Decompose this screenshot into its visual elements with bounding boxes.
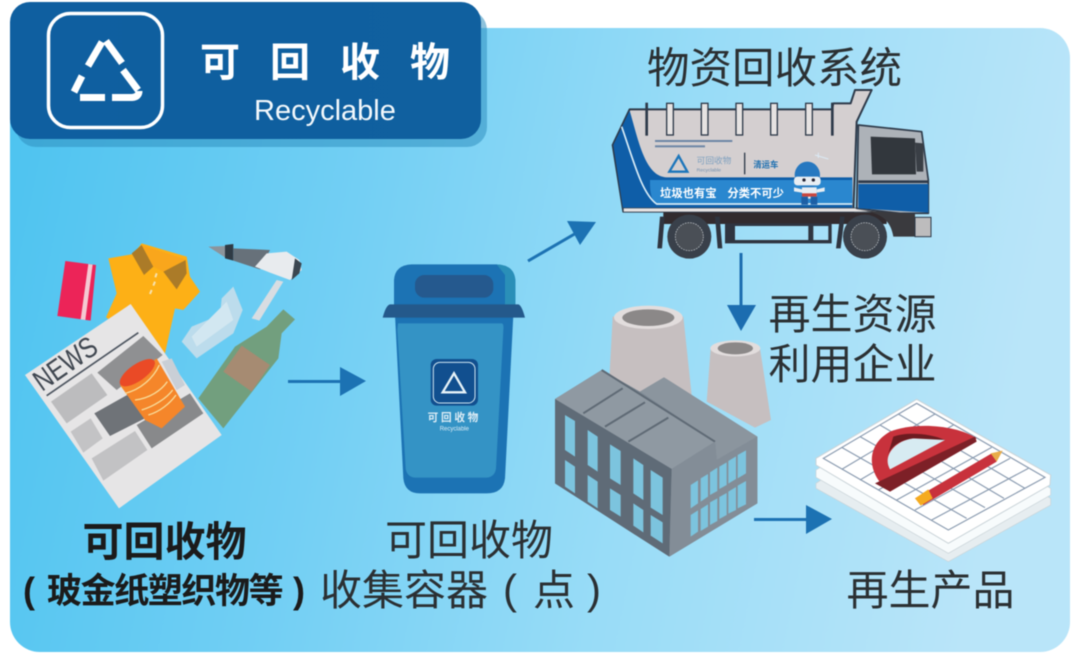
arrow: truck to factory — [727, 253, 756, 331]
caption: collection container: 可回收物 — [385, 517, 553, 564]
caption: collection container: ( — [503, 566, 517, 613]
caption: recyclables: 玻金纸塑织物等 — [47, 572, 283, 611]
caption: collection container — [320, 517, 601, 614]
cab — [857, 125, 928, 213]
icon: recycling truck: 分类不可少 — [727, 186, 784, 200]
green bottle — [198, 309, 295, 428]
heading: recovery system: 物资回收系统 — [647, 46, 902, 93]
mascot — [794, 153, 828, 205]
icon: recycling truck — [613, 90, 931, 259]
caption: recycled products: 再生产品 — [846, 567, 1015, 614]
side windows — [691, 450, 746, 537]
wheels — [667, 215, 887, 259]
panel: header banner — [10, 2, 487, 147]
caption: collection container: 收集容器 — [320, 567, 488, 614]
small cooling tower — [707, 340, 771, 428]
plastic wrap — [182, 287, 243, 358]
icon: recycled paper products — [816, 399, 1051, 562]
caption: recyclables: ( — [23, 570, 35, 611]
red book — [57, 261, 96, 321]
icon: recyclable items — [25, 243, 302, 508]
cargo body — [613, 90, 872, 212]
pencil — [915, 453, 997, 505]
chassis — [663, 212, 887, 224]
text: recycling enterprise: 利用企业 — [768, 341, 937, 388]
icon: recycling truck: Recyclable — [697, 167, 721, 173]
truck logo — [669, 156, 687, 172]
caption: recyclables: 可回收物 — [82, 519, 246, 565]
yellow shirt — [106, 243, 200, 353]
bin label — [431, 359, 478, 406]
building — [555, 370, 757, 557]
heading: english title: Recyclable — [254, 95, 396, 127]
icon: recycling bin — [383, 264, 525, 493]
caption: collection container: 点 — [533, 567, 575, 614]
large cooling tower — [609, 306, 692, 395]
small print — [655, 140, 732, 142]
paper stack — [816, 418, 1051, 562]
caption: recyclables: ) — [293, 570, 305, 611]
orange cup — [120, 358, 185, 428]
icon: recycling bin: Recyclable — [440, 426, 470, 432]
grid — [823, 403, 1045, 530]
icon: factory — [555, 306, 771, 557]
protractor — [872, 426, 977, 492]
slogan: 垃圾也有宝 — [660, 186, 717, 200]
arrow: bin to truck — [528, 221, 596, 261]
caption: recyclables — [23, 519, 305, 611]
caption: collection container: ) — [587, 566, 601, 613]
text: recycling enterprise — [768, 291, 937, 388]
hair dryer — [252, 280, 283, 321]
arrow: factory to product — [754, 505, 832, 534]
arrow: items to bin — [288, 367, 366, 396]
icon: recycling truck: 可回收物 — [697, 154, 732, 165]
icon: recycle symbol — [48, 14, 162, 128]
front windows — [565, 415, 663, 543]
icon: recycling truck: 清运车 — [753, 159, 778, 169]
heading: chinese title: 可回收物 — [200, 41, 480, 85]
newspaper — [25, 304, 222, 508]
icon: recyclable items: NEWS — [27, 330, 104, 398]
icon: recycling bin: 可回收物 — [428, 411, 481, 424]
text: recycling enterprise: 再生资源 — [768, 291, 937, 338]
body ribs — [646, 103, 833, 135]
